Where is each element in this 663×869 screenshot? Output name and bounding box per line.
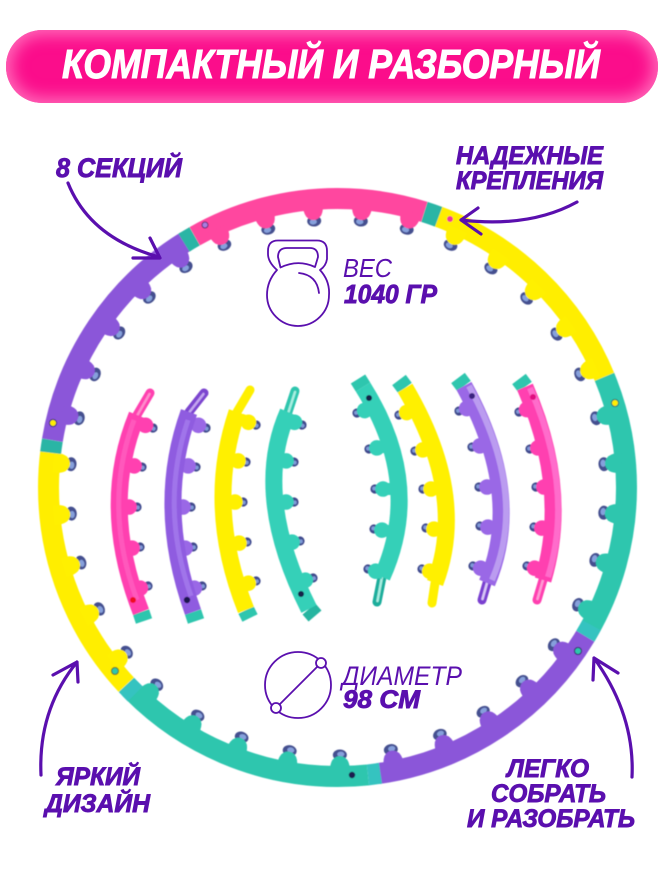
- callout: easy to assemble: СОБРАТЬ: [491, 780, 606, 808]
- callout: reliable fasteners: КРЕПЛЕНИЯ: [456, 167, 604, 195]
- arrow: to yellow section: [41, 662, 78, 775]
- segment: pink right: [512, 379, 558, 600]
- segment: purple left: [173, 393, 213, 621]
- arrow: to ring section: [68, 183, 160, 258]
- callout: reliable fasteners: НАДЕЖНЫЕ: [456, 142, 604, 170]
- text: weight: 1040 ГР: [344, 279, 438, 309]
- text: weight: ВЕС: [343, 253, 392, 283]
- hoop ring: [48, 198, 626, 778]
- segment: yellow left: [223, 390, 263, 618]
- loose segments, right group: [350, 378, 558, 603]
- text: diameter: [339, 661, 462, 714]
- icon: kettlebell: [267, 240, 329, 326]
- text: diameter: ДИАМЕТР: [339, 661, 462, 691]
- segment: purple right: [452, 378, 506, 600]
- ring section: yellow upper right: [48, 198, 626, 776]
- ring section: teal right: [48, 198, 626, 776]
- callout: easy to assemble: ЛЕГКО: [505, 755, 590, 783]
- callout: easy to assemble: [467, 658, 635, 833]
- callout: 8 sections: [56, 153, 183, 258]
- teal connectors between sections: [48, 198, 626, 776]
- text: weight: [343, 253, 438, 309]
- callout: 8 sections: 8 СЕКЦИЙ: [56, 153, 183, 183]
- segment: teal left: [274, 391, 320, 616]
- title banner: [6, 30, 658, 103]
- callout: bright design: [41, 662, 151, 818]
- ring section: pink top: [48, 198, 626, 776]
- loose segments, left group: [119, 390, 320, 621]
- ring section: purple upper left: [48, 198, 626, 776]
- text: diameter: 98 СМ: [343, 686, 421, 714]
- ring section: yellow left: [48, 198, 626, 776]
- ring section: purple lower right: [48, 198, 626, 776]
- callout: bright design: ЯРКИЙ: [55, 761, 141, 791]
- ring section: teal bottom: [48, 198, 626, 778]
- segment: yellow right: [392, 380, 446, 603]
- title banner: КОМПАКТНЫЙ И РАЗБОРНЫЙ: [62, 40, 601, 87]
- arrow: to purple section: [593, 658, 632, 777]
- callout: easy to assemble: И РАЗОБРАТЬ: [467, 805, 635, 833]
- callout: reliable fasteners: [456, 142, 604, 234]
- arrow: to fastener: [461, 202, 577, 234]
- icon: diameter: [265, 652, 331, 718]
- callout: bright design: ДИЗАЙН: [43, 788, 151, 818]
- segment: pink left: [119, 393, 160, 621]
- segment: teal right: [350, 379, 399, 602]
